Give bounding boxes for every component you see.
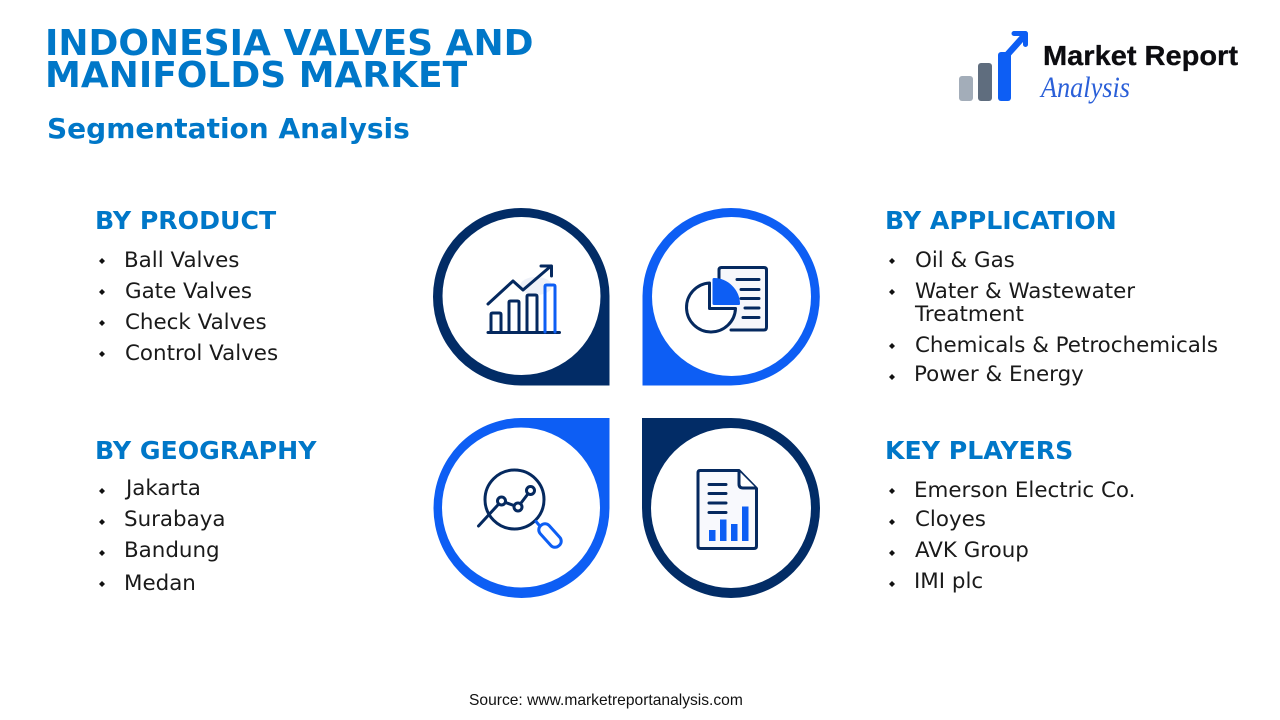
heading: key players: KEY PLAYERS bbox=[885, 436, 1073, 465]
list: by geography items: Bandung bbox=[124, 538, 220, 563]
list: by geography items bbox=[99, 476, 226, 596]
title: INDONESIA VALVES AND bbox=[45, 23, 534, 64]
list: by product items: Control Valves bbox=[125, 341, 278, 366]
title: MANIFOLDS MARKET bbox=[45, 55, 467, 96]
teardrop: top-left navy with rising bar chart icon bbox=[433, 208, 610, 386]
list: by application items bbox=[889, 248, 1218, 387]
subtitle: Segmentation Analysis bbox=[47, 112, 410, 145]
logo: Market Report Analysis bbox=[959, 31, 1238, 104]
list: by product items bbox=[99, 248, 278, 366]
teardrop: top-right blue with pie and document icon bbox=[642, 208, 820, 386]
list: key players items: AVK Group bbox=[915, 538, 1029, 563]
source line: Source: www.marketreportanalysis.com bbox=[469, 692, 743, 709]
list: by application items: Chemicals & Petrochemicals bbox=[915, 333, 1218, 358]
teardrop: bottom-left blue with magnifier icon bbox=[434, 418, 610, 598]
heading: by geography: BY GEOGRAPHY bbox=[95, 436, 316, 465]
icon: pie chart and document bbox=[687, 268, 766, 332]
panel: by geography bbox=[95, 436, 317, 596]
list: by application items: Treatment bbox=[915, 302, 1024, 327]
panel: by application bbox=[885, 206, 1218, 387]
list: by application items: Oil & Gas bbox=[915, 248, 1015, 273]
list: by product items: Gate Valves bbox=[125, 279, 252, 304]
list: by application items: Water & Wastewater bbox=[915, 279, 1135, 304]
list: key players items: Cloyes bbox=[915, 507, 986, 532]
panel: by product bbox=[95, 206, 278, 366]
icon: rising bar chart bbox=[488, 266, 560, 332]
logo: Market Report Analysis: Market Report bbox=[1043, 40, 1238, 71]
heading: by product: BY PRODUCT bbox=[95, 206, 276, 235]
logo: Market Report Analysis: Analysis bbox=[1039, 71, 1130, 104]
list: by product items: Check Valves bbox=[125, 310, 267, 335]
list: by application items: Power & Energy bbox=[914, 362, 1084, 387]
list: key players items: IMI plc bbox=[914, 569, 983, 594]
icon: report document with bars bbox=[698, 470, 756, 548]
list: by geography items: Surabaya bbox=[124, 507, 226, 532]
list: key players items: Emerson Electric Co. bbox=[914, 478, 1135, 503]
teardrop: bottom-right navy with report icon bbox=[642, 418, 820, 598]
list: by geography items: Medan bbox=[124, 571, 196, 596]
list: by geography items: Jakarta bbox=[126, 476, 201, 501]
title bbox=[45, 23, 534, 96]
icon: magnifying glass over line chart bbox=[478, 470, 563, 550]
list: by product items: Ball Valves bbox=[124, 248, 239, 273]
heading: by application: BY APPLICATION bbox=[885, 206, 1117, 235]
list: key players items bbox=[889, 478, 1135, 594]
